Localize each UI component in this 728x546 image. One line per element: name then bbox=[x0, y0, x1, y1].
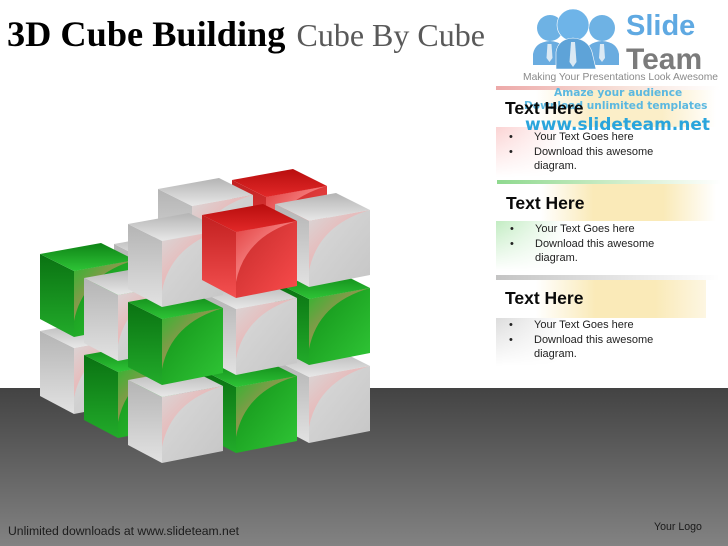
heading: second block: Text Here bbox=[506, 193, 584, 213]
heading: first block: Text Here bbox=[505, 98, 583, 118]
bullets: first block: Download this awesome bbox=[534, 146, 653, 158]
bullets: third block: • bbox=[509, 319, 513, 331]
cube: middle green right bbox=[275, 271, 370, 365]
panel: third text block bbox=[496, 275, 706, 354]
cube: top white front bbox=[128, 213, 223, 307]
bullets: second block: diagram. bbox=[535, 252, 578, 264]
cube: middle green left bbox=[40, 243, 135, 337]
cube: middle white left bbox=[84, 267, 179, 361]
cube: bottom white front bbox=[128, 369, 223, 463]
cube: top white right bbox=[275, 193, 370, 287]
footer: logo placeholder: Your Logo bbox=[654, 521, 702, 533]
bullets: second block: Your Text Goes here bbox=[535, 223, 635, 235]
bullets: first block bbox=[509, 131, 653, 172]
panel: first text block bbox=[496, 86, 708, 168]
bullets: third block: • bbox=[509, 334, 513, 346]
cube: middle white back bbox=[114, 233, 209, 327]
logo: Slide Team bbox=[523, 9, 718, 83]
footer: downloads note: Unlimited downloads at www.slideteam.net bbox=[8, 524, 239, 538]
cube: bottom white left bbox=[40, 320, 135, 414]
logo tagline: Making Your Presentations Look Awesome bbox=[523, 72, 718, 83]
bullets: second block: Download this awesome bbox=[535, 238, 654, 250]
cube: top white back bbox=[158, 178, 253, 272]
bullets: third block: Your Text Goes here bbox=[534, 319, 634, 331]
bullets: third block: Download this awesome bbox=[534, 334, 653, 346]
cube: top red back bbox=[232, 169, 327, 263]
title: 3D Cube Building Cube By Cube bbox=[7, 14, 485, 54]
icon: three business people bbox=[533, 9, 619, 69]
cube: bottom green left bbox=[84, 344, 179, 438]
bullets: first block: Your Text Goes here bbox=[534, 131, 634, 143]
heading: third block: Text Here bbox=[505, 288, 583, 308]
bullets: first block: • bbox=[509, 131, 513, 143]
cube: middle green front bbox=[128, 291, 223, 385]
bullets: third block bbox=[509, 319, 653, 360]
bullets: third block: diagram. bbox=[534, 348, 577, 360]
watermark: Amaze your audience: Amaze your audience bbox=[554, 87, 682, 99]
bullets: first block: diagram. bbox=[534, 160, 577, 172]
watermark: Download unlimited templates: Download unlimited templates bbox=[524, 100, 707, 112]
watermark: www.slideteam.net: www.slideteam.net bbox=[525, 115, 710, 135]
bullets: second block bbox=[510, 223, 654, 264]
logo wordmark: Team: Team bbox=[626, 43, 702, 76]
logo wordmark: Slide: Slide bbox=[626, 10, 695, 42]
cube: middle white front bbox=[202, 281, 297, 375]
panel: second text block bbox=[496, 180, 710, 264]
cube: bottom white right bbox=[275, 349, 370, 443]
cube: bottom green front bbox=[202, 359, 297, 453]
bullets: second block: • bbox=[510, 223, 514, 235]
floor background bbox=[0, 388, 728, 546]
bullets: second block: • bbox=[510, 238, 514, 250]
bullets: first block: • bbox=[509, 146, 513, 158]
cube: top red front bbox=[202, 204, 297, 298]
